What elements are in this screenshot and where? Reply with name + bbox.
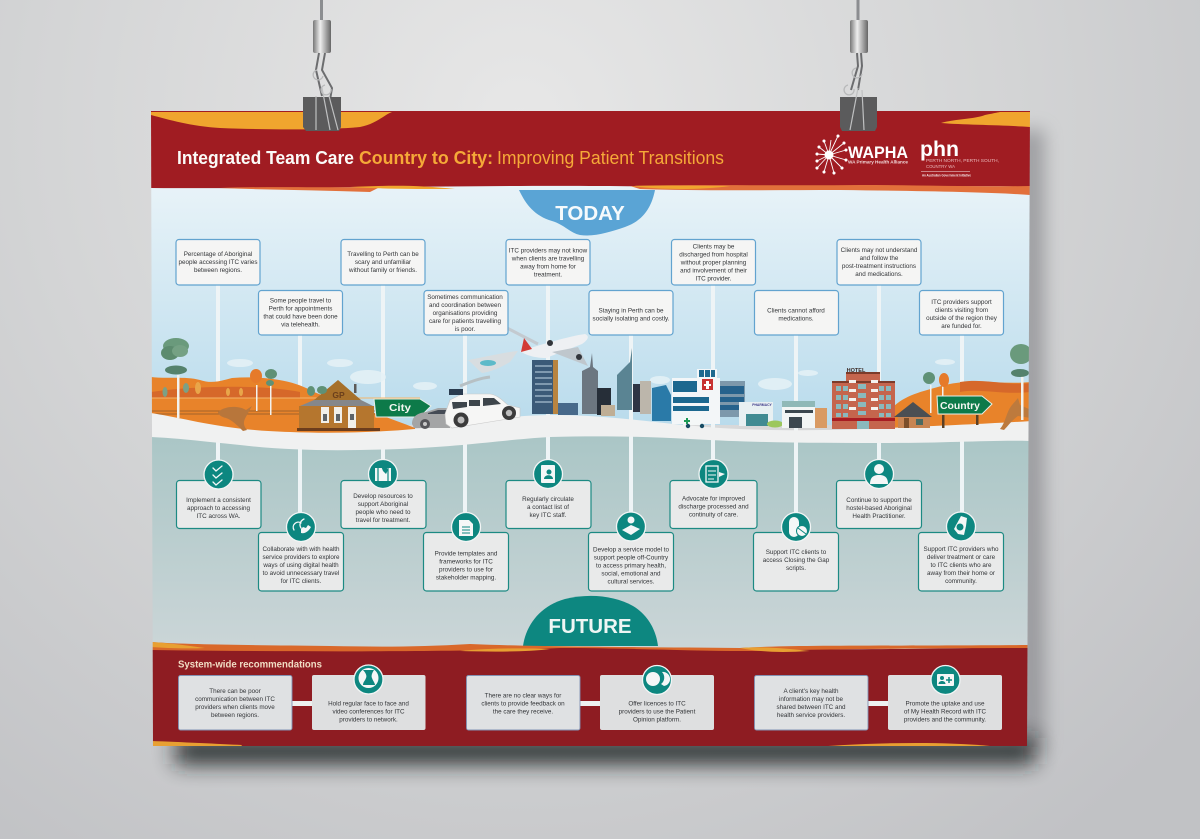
tree right pair bbox=[923, 372, 949, 413]
card: poor communication: There can be poor bbox=[209, 688, 261, 695]
hotel bbox=[832, 368, 895, 429]
sky background bbox=[151, 185, 1031, 425]
card: away from community: community. bbox=[945, 578, 977, 585]
card: communication: is poor. bbox=[455, 326, 475, 333]
Future tab: FUTURE bbox=[548, 615, 632, 638]
left outback hills bbox=[151, 377, 420, 436]
card: scary travel: without family or friends. bbox=[348, 267, 417, 274]
card: poor communication bbox=[178, 676, 292, 730]
PHN logo: phn bbox=[920, 138, 959, 161]
card: telehealth: Perth for appointments bbox=[269, 306, 332, 312]
card: resources: travel for treatment. bbox=[356, 517, 411, 524]
icon: speech bubbles bbox=[642, 666, 672, 694]
card: face to face meetings: Hold regular face to face and bbox=[328, 700, 409, 708]
card: communication: Sometimes communication bbox=[427, 294, 503, 301]
future cards upper row bbox=[176, 480, 922, 528]
card: resources: support Aboriginal bbox=[358, 501, 408, 508]
PHN logo: An Australian Government Initiative bbox=[922, 174, 971, 178]
ambulance bbox=[683, 418, 704, 428]
card: communication: care for patients travelling bbox=[429, 318, 502, 325]
card: health practitioner: Continue to support the bbox=[846, 497, 912, 504]
card: providers unaware: ITC providers may not know bbox=[509, 248, 588, 254]
card: away from community: Support ITC providers who bbox=[924, 546, 999, 553]
card: information sharing bbox=[754, 676, 868, 730]
bottom red band bbox=[151, 642, 1031, 750]
card: templates: Provide templates and bbox=[435, 550, 498, 558]
card: information sharing: A client's key health bbox=[783, 688, 839, 695]
tree left large bbox=[161, 338, 189, 418]
card: My Health Record: of My Health Record with ITC bbox=[904, 708, 987, 716]
white four wheel drive bbox=[445, 389, 520, 428]
card: digital health bbox=[258, 532, 344, 591]
card: regional access: Percentage of Aboriginal bbox=[184, 251, 252, 258]
card: instructions bbox=[837, 240, 921, 285]
card: medications bbox=[754, 290, 838, 335]
card: templates bbox=[424, 532, 508, 591]
card: resources: people who need to bbox=[356, 509, 411, 516]
recommendation pair: feedback bbox=[466, 675, 714, 730]
card: no feedback route: the care they receive. bbox=[493, 708, 553, 716]
PHN logo: PERTH NORTH, PERTH SOUTH, bbox=[926, 158, 999, 163]
card: providers unaware: away from home for bbox=[520, 264, 576, 270]
recommendations heading: System-wide recommendations bbox=[178, 658, 322, 670]
card: resources bbox=[341, 480, 426, 528]
PHN logo: COUNTRY WA bbox=[926, 164, 955, 169]
icon: WAPHA sunburst bbox=[816, 135, 847, 174]
card: health practitioner: Health Practitioner. bbox=[852, 513, 906, 520]
WAPHA logo bbox=[816, 135, 908, 174]
pharmacy: PHARMACY bbox=[752, 403, 773, 407]
card: contact list: a contact list of bbox=[527, 504, 569, 511]
card: telehealth: via telehealth. bbox=[281, 322, 320, 328]
WAPHA logo: WAPHA bbox=[848, 143, 908, 162]
icon: documents bbox=[452, 512, 480, 542]
desert shrubs bbox=[162, 382, 243, 397]
card: information sharing: information may not be bbox=[779, 696, 844, 703]
card: face to face meetings: providers to network. bbox=[339, 716, 398, 724]
card: contact list bbox=[506, 480, 591, 528]
icon: wristwatch bbox=[946, 512, 976, 541]
card: My Health Record bbox=[888, 675, 1002, 730]
card: consistent approach: approach to accessing bbox=[187, 505, 250, 512]
title: Integrated Team Care bbox=[177, 148, 354, 168]
city skyline bbox=[532, 348, 671, 421]
card: templates: providers to use for bbox=[439, 566, 493, 574]
card: Closing the Gap: scripts. bbox=[786, 565, 806, 572]
card: My Health Record: providers and the community. bbox=[904, 716, 986, 724]
pharmacy bbox=[739, 402, 783, 428]
card: off-Country model: to access primary health, bbox=[596, 562, 666, 570]
card: away from community bbox=[918, 532, 1004, 591]
card: digital health: to avoid unnecessary travel bbox=[263, 570, 339, 577]
icon: checklist bbox=[204, 460, 233, 489]
poster bbox=[151, 111, 1032, 750]
Future tab bbox=[523, 596, 658, 646]
card: digital health: Collaborate with with health bbox=[262, 546, 340, 553]
card: consistent approach bbox=[176, 480, 261, 528]
card: telehealth bbox=[258, 290, 342, 335]
card: digital health: for ITC clients. bbox=[281, 578, 322, 585]
title: Improving Patient Transitions bbox=[497, 148, 724, 168]
card: Closing the Gap bbox=[754, 532, 838, 591]
right hanging clip bbox=[840, 0, 877, 131]
card: health practitioner: hostel-based Aboriginal bbox=[846, 505, 912, 512]
white road wave bbox=[151, 413, 1031, 450]
card: no feedback route: There are no clear ways for bbox=[485, 692, 561, 700]
card: telehealth: Some people travel to bbox=[270, 298, 332, 304]
card: face to face meetings: video conferences for ITC bbox=[332, 708, 405, 716]
card: away from community: away from their home or bbox=[927, 570, 995, 577]
card: funded: ITC providers support bbox=[931, 299, 992, 306]
card: isolating: socially isolating and costly. bbox=[593, 316, 670, 322]
GP clinic house bbox=[297, 380, 380, 431]
card: hospital discharge: ITC provider. bbox=[695, 276, 732, 282]
card: regional access bbox=[176, 240, 260, 285]
card: isolating bbox=[589, 290, 673, 335]
today cards lower row bbox=[258, 290, 1004, 335]
card: poor communication: communication between ITC bbox=[195, 696, 275, 703]
clouds bbox=[227, 359, 955, 390]
card: providers unaware: when clients are travelling bbox=[511, 256, 585, 262]
card: communication: and coordination between bbox=[429, 302, 502, 309]
today cards upper row bbox=[176, 240, 921, 285]
card: medications: medications. bbox=[778, 316, 814, 322]
card: hospital discharge: without proper planning bbox=[680, 260, 747, 266]
card: communication bbox=[424, 290, 508, 335]
card: telehealth: that could have been done bbox=[263, 314, 338, 320]
card: My Health Record: Promote the uptake and use bbox=[905, 700, 985, 708]
card: funded: are funded for. bbox=[941, 323, 982, 330]
Country road sign: Country bbox=[940, 401, 980, 412]
card: scary travel bbox=[341, 240, 425, 285]
card: information sharing: shared between ITC and bbox=[777, 704, 846, 711]
silver car bbox=[412, 408, 450, 429]
header band bbox=[151, 111, 1030, 195]
icon: discharge form bbox=[699, 460, 728, 488]
card: templates: stakeholder mapping. bbox=[436, 574, 496, 582]
card: no feedback route bbox=[466, 676, 580, 730]
City road sign: City bbox=[389, 403, 411, 414]
card: instructions: and medications. bbox=[855, 271, 903, 278]
card: hospital discharge: Clients may be bbox=[693, 244, 735, 250]
left hanging clip bbox=[303, 0, 341, 131]
Today tab: TODAY bbox=[555, 202, 625, 225]
connector bars bbox=[292, 701, 888, 706]
card: off-Country model: Develop a service model to bbox=[593, 546, 669, 554]
card: Patient Opinion licences: providers to use the Patient bbox=[619, 708, 696, 716]
icon: address book bbox=[534, 460, 562, 488]
icon: video head silhouettes bbox=[354, 665, 383, 694]
icon: person with caring hand bbox=[616, 512, 646, 541]
card: away from community: to ITC clients who are bbox=[931, 562, 992, 569]
kangaroo left bbox=[218, 406, 252, 431]
kangaroo right bbox=[1000, 398, 1031, 430]
title: Country to City: bbox=[359, 148, 493, 168]
card: consistent approach: Implement a consistent bbox=[186, 497, 251, 504]
card: instructions: and follow the bbox=[860, 255, 899, 262]
card: scary travel: scary and unfamiliar bbox=[355, 259, 411, 266]
card: hospital discharge bbox=[672, 240, 756, 285]
hospital bbox=[672, 369, 745, 424]
tree right large bbox=[1010, 344, 1029, 420]
poster shadow bbox=[175, 130, 1044, 764]
card: Closing the Gap: access Closing the Gap bbox=[763, 557, 830, 564]
card: away from community: deliver treatment or care bbox=[927, 554, 996, 561]
icon: health record card bbox=[931, 666, 960, 694]
Country road sign bbox=[937, 396, 992, 428]
icon: suitcase bbox=[368, 460, 398, 488]
card: funded bbox=[920, 290, 1004, 335]
card: health practitioner bbox=[836, 480, 922, 528]
City road sign bbox=[374, 399, 431, 417]
card: isolating: Staying in Perth can be bbox=[598, 308, 664, 314]
Today tab bbox=[519, 190, 655, 235]
title bbox=[178, 150, 724, 168]
card: providers unaware bbox=[506, 240, 590, 285]
card: discharge advocacy bbox=[670, 480, 757, 528]
card: contact list: key ITC staff. bbox=[530, 512, 567, 519]
card: off-Country model bbox=[588, 532, 674, 591]
card: providers unaware: treatment. bbox=[534, 272, 562, 278]
card: consistent approach: ITC across WA. bbox=[197, 513, 241, 520]
card: off-Country model: support people off-Country bbox=[594, 554, 669, 562]
card: instructions: post-treatment instructions bbox=[842, 263, 916, 270]
card: Patient Opinion licences: Opinion platform. bbox=[633, 716, 681, 724]
card: medications: Clients cannot afford bbox=[767, 308, 825, 314]
card: off-Country model: social, emotional and bbox=[601, 570, 661, 578]
card: contact list: Regularly circulate bbox=[522, 496, 574, 503]
recommendation pair: health records bbox=[754, 675, 1002, 730]
icon: stethoscope and phone bbox=[286, 512, 316, 542]
card: off-Country model: cultural services. bbox=[608, 578, 655, 586]
card: discharge advocacy: continuity of care. bbox=[689, 512, 738, 518]
medical centre bbox=[782, 401, 827, 428]
card: instructions: Clients may not understand bbox=[841, 247, 918, 254]
card: funded: clients visiting from bbox=[935, 307, 988, 314]
GP clinic house: GP bbox=[332, 390, 345, 400]
tree left small pair bbox=[250, 369, 277, 415]
card: hospital discharge: discharged from hospital bbox=[679, 252, 748, 258]
connector lines today and future bbox=[216, 286, 964, 512]
card: digital health: service providers to explore bbox=[262, 554, 340, 561]
card: no feedback route: clients to provide feedback on bbox=[481, 700, 565, 708]
card: face to face meetings bbox=[312, 675, 426, 730]
card: hospital discharge: and involvement of their bbox=[680, 268, 747, 274]
card: Closing the Gap: Support ITC clients to bbox=[766, 549, 827, 556]
card: digital health: ways of using digital health bbox=[262, 562, 339, 569]
card: funded: outside of the region they bbox=[926, 315, 998, 322]
card: regional access: people accessing ITC varies bbox=[178, 259, 258, 266]
icon: practitioner with headset bbox=[864, 460, 894, 488]
card: poor communication: between regions. bbox=[211, 712, 259, 719]
icon: pills bbox=[782, 512, 810, 542]
card: scary travel: Travelling to Perth can be bbox=[347, 251, 419, 258]
recommendation pair: communication bbox=[178, 675, 426, 730]
hotel: HOTEL bbox=[847, 368, 866, 374]
card: poor communication: providers when clients move bbox=[195, 704, 275, 711]
large airliner bbox=[507, 328, 588, 366]
card: communication: organisations providing bbox=[433, 310, 498, 317]
small brick house bbox=[894, 402, 932, 428]
teal future background bbox=[151, 435, 1031, 655]
card: Patient Opinion licences: Offer licences to ITC bbox=[628, 700, 686, 708]
card: discharge advocacy: Advocate for improved bbox=[682, 496, 745, 502]
card: information sharing: health service providers. bbox=[777, 712, 845, 719]
WAPHA logo: WA Primary Health Alliance bbox=[848, 160, 908, 164]
right outback hills bbox=[895, 380, 1029, 428]
PHN logo bbox=[921, 140, 999, 176]
future cards lower row bbox=[258, 532, 1004, 591]
card: resources: Develop resources to bbox=[353, 493, 413, 500]
card: regional access: between regions. bbox=[194, 267, 242, 274]
small plane and trail bbox=[460, 351, 518, 386]
card: discharge advocacy: discharge processed and bbox=[678, 504, 749, 510]
card: Patient Opinion licences bbox=[600, 675, 714, 730]
card: templates: frameworks for ITC bbox=[439, 558, 493, 566]
